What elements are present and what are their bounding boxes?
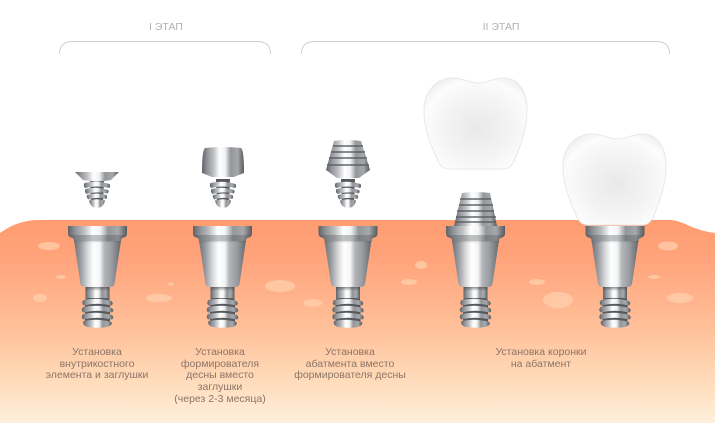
gum background <box>0 220 715 423</box>
heading: stage I: I ЭТАП <box>149 21 183 33</box>
bracket: stage II <box>302 42 670 54</box>
caption: steps 4-5: на абатмент <box>511 358 571 370</box>
cover screw <box>75 172 119 208</box>
crown <box>424 78 527 169</box>
crown <box>563 134 666 225</box>
implant body <box>193 226 252 328</box>
step 3: implant with abutment <box>318 140 378 328</box>
implant body <box>446 226 505 328</box>
caption: step 2: формирователя <box>181 358 259 370</box>
caption: step 2: Установка <box>195 346 245 358</box>
bracket: stage I <box>60 42 270 54</box>
step 2: implant with gingival former <box>193 147 252 328</box>
abutment <box>454 192 497 226</box>
abutment <box>326 140 370 208</box>
step 4: crown above abutment on implant <box>424 78 527 328</box>
implant body <box>586 226 644 328</box>
caption: step 3: формирователя десны <box>294 369 406 381</box>
gum spots <box>33 242 693 308</box>
heading: stage II: II ЭТАП <box>483 21 519 33</box>
step 1: implant with cover screw <box>68 172 127 328</box>
gingival former <box>202 147 244 208</box>
caption: step 1: внутрикостного <box>60 358 135 370</box>
implant body <box>318 226 378 328</box>
caption: step 2: заглушки <box>198 381 242 393</box>
caption: step 2: (через 2-3 месяца) <box>174 393 266 405</box>
step 5: finished tooth on implant <box>563 134 666 328</box>
caption: step 1: Установка <box>72 346 122 358</box>
caption: step 2: десны вместо <box>186 369 254 381</box>
caption: step 3: Установка <box>325 346 375 358</box>
caption: step 3: абатмента вместо <box>306 358 394 370</box>
implant body <box>68 226 127 328</box>
caption: step 1: элемента и заглушки <box>46 369 148 381</box>
caption: steps 4-5: Установка коронки <box>495 346 587 358</box>
